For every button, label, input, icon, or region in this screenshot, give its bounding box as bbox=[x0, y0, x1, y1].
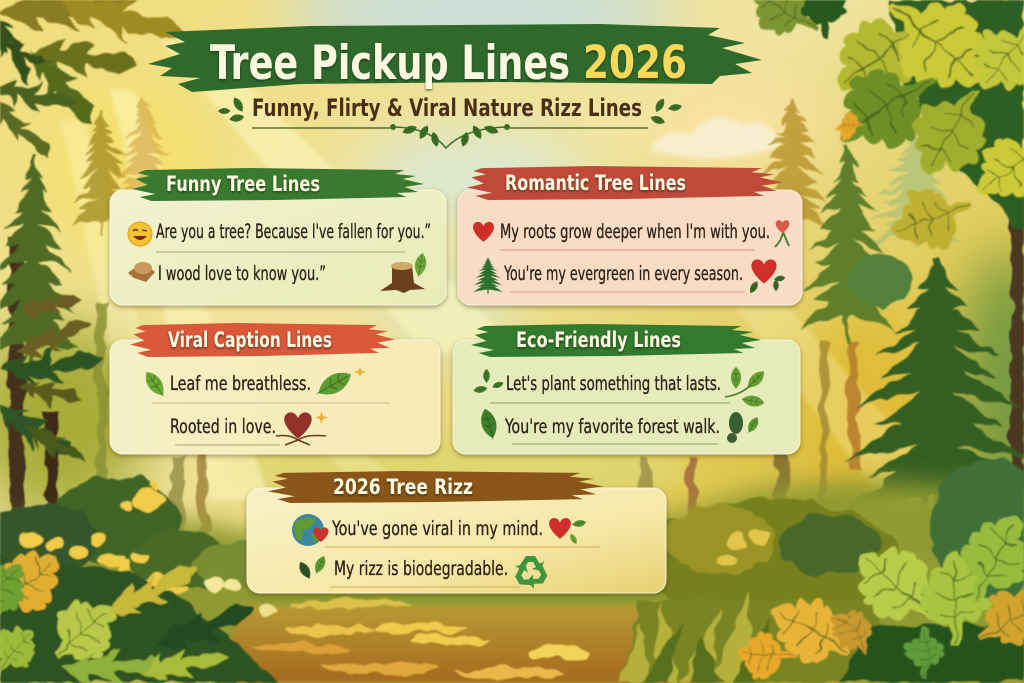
heading: Funny Tree Lines bbox=[166, 172, 320, 196]
distant trees bbox=[70, 97, 960, 545]
title block bbox=[148, 24, 762, 148]
title year: 2026 bbox=[583, 36, 687, 89]
line 2: I wood love to know you.” bbox=[158, 262, 326, 285]
line 1: Leaf me breathless. bbox=[170, 372, 311, 395]
ground bbox=[0, 480, 1024, 683]
icon: left sprig bbox=[218, 96, 246, 123]
heading brush bbox=[132, 168, 424, 201]
icon: globe with heart bbox=[292, 514, 329, 546]
card bbox=[453, 340, 800, 454]
heading brush bbox=[130, 323, 395, 357]
icon: tree stump with leaf bbox=[380, 252, 428, 293]
sun rays bbox=[60, 40, 1010, 590]
top left branches bbox=[0, 0, 191, 167]
heading: 2026 Tree Rizz bbox=[333, 475, 473, 499]
icon: leaf bbox=[141, 368, 169, 400]
icon: rose bbox=[775, 220, 789, 247]
icon: big leaf bbox=[478, 407, 500, 441]
panel: romantic tree lines bbox=[458, 166, 802, 305]
icon: heart with leaves bbox=[747, 259, 786, 295]
panel: viral caption lines bbox=[110, 323, 440, 454]
line 1: My roots grow deeper when I'm with you. bbox=[500, 220, 770, 243]
subtitle: Funny, Flirty & Viral Nature Rizz Lines bbox=[252, 94, 642, 122]
heading brush bbox=[467, 166, 783, 200]
icon: leaf with sparkle bbox=[313, 366, 366, 402]
icon: right sprig bbox=[649, 97, 683, 126]
panel: funny tree lines bbox=[110, 168, 446, 305]
icon: footprint and leaf bbox=[727, 412, 761, 443]
heading: Eco-Friendly Lines bbox=[516, 328, 681, 352]
icon: heart and leaves bbox=[549, 518, 587, 546]
line 2: You're my favorite forest walk. bbox=[504, 415, 720, 438]
card bbox=[247, 488, 666, 593]
title brush stroke bbox=[148, 24, 762, 92]
icon: two leaves bbox=[296, 554, 328, 581]
icon: leafy branch bbox=[725, 367, 768, 408]
heading brush bbox=[471, 324, 761, 357]
icon: rooted heart bbox=[276, 411, 328, 445]
card bbox=[458, 190, 802, 305]
heading: Romantic Tree Lines bbox=[505, 171, 686, 195]
icon: pine tree bbox=[473, 258, 503, 294]
heading: Viral Caption Lines bbox=[168, 328, 332, 352]
line 2: You're my evergreen in every season. bbox=[503, 262, 743, 285]
icon: winking face bbox=[128, 222, 152, 246]
panel: eco-friendly lines bbox=[453, 324, 800, 454]
card bbox=[110, 340, 440, 454]
bottom right foliage bbox=[733, 502, 1024, 682]
icon: sprout bbox=[472, 369, 505, 394]
heading brush bbox=[268, 471, 603, 503]
icon: heart bbox=[473, 222, 494, 242]
line 2: Rooted in love. bbox=[170, 415, 276, 438]
line 1: You've gone viral in my mind. bbox=[331, 517, 543, 540]
line 1: Let's plant something that lasts. bbox=[506, 372, 721, 395]
icon: wood log bbox=[128, 262, 155, 282]
bottom left foliage bbox=[0, 534, 280, 683]
icon: recycle symbol bbox=[511, 556, 551, 591]
card bbox=[110, 190, 446, 305]
top right oak foliage bbox=[738, 0, 1024, 261]
right pines bbox=[840, 190, 1024, 560]
garland divider bbox=[252, 124, 648, 148]
title: Tree Pickup Lines bbox=[210, 36, 570, 91]
left bushes with yellow flowers bbox=[0, 475, 280, 616]
panel: 2026 tree rizz bbox=[247, 471, 666, 593]
line 1: Are you a tree? Because I've fallen for you.” bbox=[156, 220, 431, 243]
line 2: My rizz is biodegradable. bbox=[334, 557, 508, 580]
right bushes and grasses bbox=[620, 460, 1024, 683]
mid right pines bbox=[800, 142, 912, 342]
left pines bbox=[0, 155, 106, 535]
